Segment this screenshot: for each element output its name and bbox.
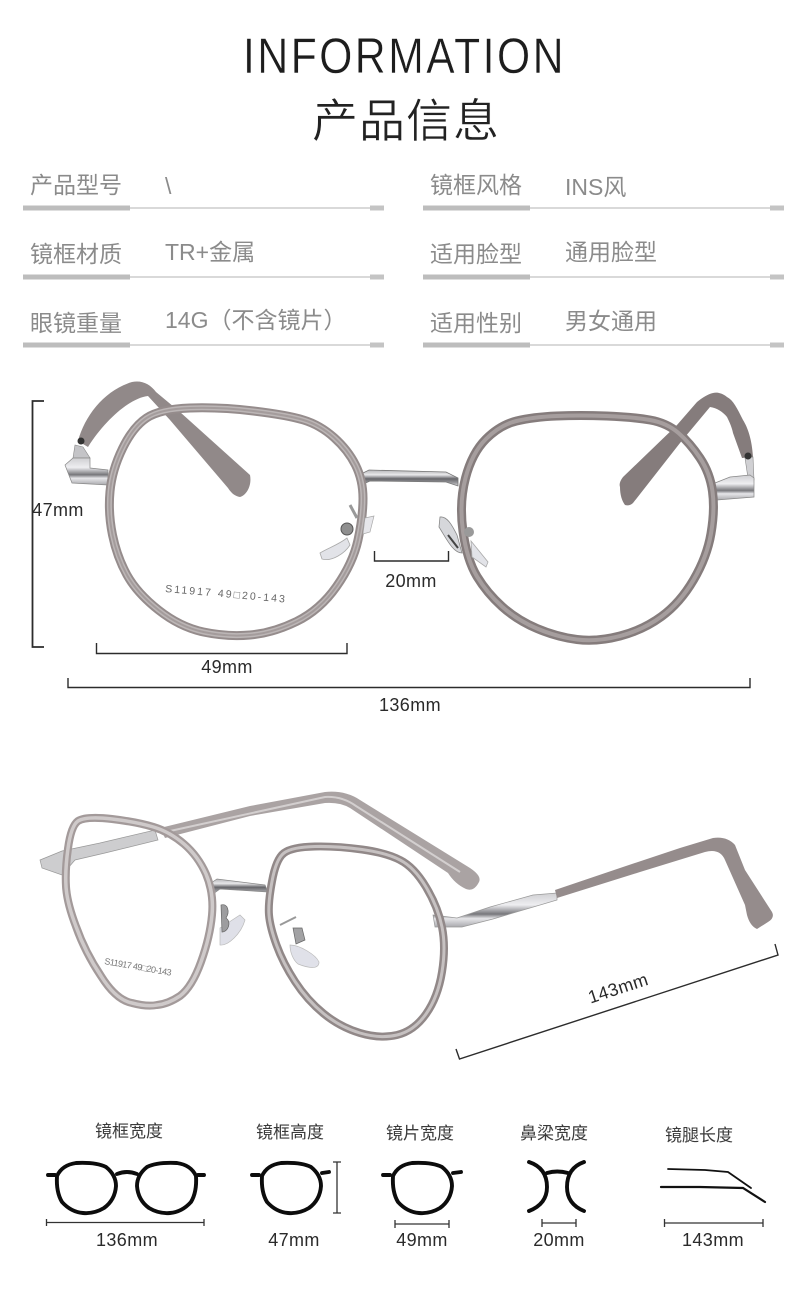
dimension: 49mm lens: 49mm bbox=[201, 657, 253, 677]
dimension: 20mm bridge bbox=[374, 551, 448, 591]
bridge bbox=[211, 879, 268, 894]
side view glasses bbox=[40, 792, 773, 1037]
right temple arm bbox=[620, 393, 753, 505]
dimension: 47mm height bbox=[32, 401, 84, 647]
row: 适用脸型: 适用脸型 bbox=[430, 241, 522, 267]
panel: temple length icon: 镜腿长度 bbox=[665, 1126, 733, 1145]
row: 眼镜重量: 眼镜重量 bbox=[30, 310, 122, 336]
bridge bbox=[361, 470, 458, 486]
title: INFORMATION: INFORMATION bbox=[243, 28, 566, 84]
right lens rim bbox=[461, 416, 713, 640]
near nose pad right bbox=[280, 917, 319, 968]
panel: product spec table bbox=[23, 172, 784, 348]
lens engraving: S11917 49□20-143 bbox=[165, 583, 285, 605]
dimension: 136mm width bbox=[68, 678, 750, 715]
dimension: 20mm bridge: 20mm bbox=[385, 571, 437, 591]
row: 适用性别: 男女通用 bbox=[565, 308, 657, 334]
dimension: 143mm temple: 143mm bbox=[586, 969, 651, 1007]
dimension: 136mm width: 136mm bbox=[379, 695, 441, 715]
left lens rim bbox=[109, 408, 363, 636]
panel: temple length icon: 143mm bbox=[682, 1230, 744, 1250]
row: 产品型号: 产品型号 bbox=[30, 172, 122, 198]
row: 适用脸型: 通用脸型 bbox=[565, 239, 657, 265]
panel: lens width icon: 49mm bbox=[396, 1230, 448, 1250]
row: 镜框材质: 镜框材质 bbox=[30, 241, 122, 267]
left hinge bbox=[65, 438, 108, 485]
lens engraving: S11917 49□20-143 bbox=[104, 956, 172, 978]
left nose pad bbox=[320, 505, 374, 560]
near nose pad left bbox=[220, 905, 245, 945]
row: 镜框材质: TR+金属 bbox=[165, 239, 255, 265]
row: 适用性别 bbox=[423, 308, 784, 348]
right lens rim bbox=[269, 846, 444, 1037]
panel: frame width icon: 136mm bbox=[96, 1230, 158, 1250]
panel: bridge width icon bbox=[520, 1124, 588, 1250]
dimension: 47mm height: 47mm bbox=[32, 500, 84, 520]
row: 眼镜重量: 14G（不含镜片） bbox=[165, 307, 346, 333]
far silver hinge bbox=[40, 830, 158, 875]
left temple arm bbox=[78, 381, 250, 497]
row: 镜框材质 bbox=[23, 239, 384, 280]
near temple metal bbox=[433, 893, 557, 927]
panel: lens width icon: 镜片宽度 bbox=[386, 1124, 454, 1143]
row: 适用性别: 适用性别 bbox=[430, 310, 522, 336]
row: 镜框风格 bbox=[423, 172, 784, 210]
row: 眼镜重量 bbox=[23, 307, 384, 348]
panel: frame height icon: 镜框高度 bbox=[256, 1123, 324, 1142]
near temple arm bbox=[555, 838, 773, 929]
right hinge bbox=[715, 452, 754, 500]
title: 产品信息: 产品信息 bbox=[312, 95, 500, 147]
right nose pad bbox=[439, 517, 488, 567]
row: 产品型号: \ bbox=[165, 173, 172, 199]
panel: bridge width icon: 鼻梁宽度 bbox=[520, 1124, 588, 1143]
far temple arm bbox=[160, 792, 480, 890]
dimension: 143mm temple bbox=[456, 944, 778, 1059]
row: 产品型号 bbox=[23, 172, 384, 210]
panel: frame width icon: 镜框宽度 bbox=[95, 1122, 163, 1141]
panel: lens width icon bbox=[383, 1124, 461, 1250]
row: 镜框风格: 镜框风格 bbox=[430, 172, 522, 198]
panel: temple length icon bbox=[661, 1126, 765, 1250]
panel: frame height icon: 47mm bbox=[268, 1230, 320, 1250]
row: 镜框风格: INS风 bbox=[565, 174, 626, 200]
panel: bridge width icon: 20mm bbox=[533, 1230, 585, 1250]
front view glasses bbox=[65, 381, 754, 640]
dimension: 49mm lens bbox=[96, 643, 347, 677]
left lens rim bbox=[66, 818, 212, 1006]
panel: frame height icon bbox=[252, 1123, 341, 1250]
panel: frame width icon bbox=[46, 1122, 204, 1250]
row: 适用脸型 bbox=[423, 239, 784, 280]
